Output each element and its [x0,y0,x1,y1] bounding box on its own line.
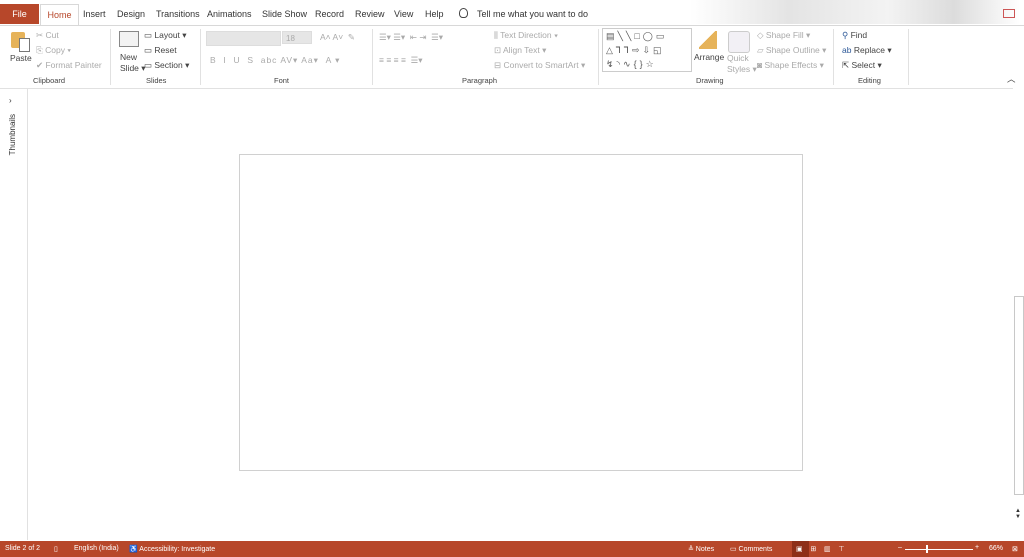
drawing group: Drawing [696,76,724,85]
paragraph group: ⊡ Align Text ▾ [494,45,546,55]
scrollbar [1013,88,1024,540]
font group: Font [274,76,289,85]
scrollbar: ▲ [1015,508,1021,514]
slide [239,154,803,471]
status bar: – [898,544,902,551]
paragraph group: ⊟ Convert to SmartArt ▾ [494,60,585,70]
paragraph group: ⫼ Text Direction ▾ [494,30,558,40]
clipboard group: ✂ Cut [36,30,59,40]
status bar: English (India) [74,545,119,552]
scrollbar: ▼ [1015,514,1021,520]
slides group [119,30,190,85]
status bar [0,541,1024,557]
font group [206,31,355,85]
tab bar: Review [355,9,385,19]
tab bar: Transitions [156,9,200,19]
Home tab [40,4,79,26]
File tab [0,4,39,24]
thumbnails pane: Thumbnails [8,114,17,155]
tab bar: Slide Show [262,9,307,19]
decorative header background [690,0,1020,24]
clipboard group: ⎘ Copy ▾ [36,45,71,55]
status bar: ≜ Notes [688,546,714,553]
tab bar: Animations [207,9,252,19]
slides group: New [120,52,137,62]
clipboard group: Clipboard [33,76,65,85]
drawing group: ◙ Shape Effects ▾ [757,60,824,70]
clipboard group: ✔ Format Painter [36,60,102,70]
slides group: Slides [146,76,166,85]
paragraph group: ☰▾ ☰▾ ⇤ ⇥ ☰▾ [379,32,443,42]
status bar: + [975,544,979,551]
paragraph group: ≡ ≡ ≡ ≡ ☰▾ [379,55,423,65]
drawing group: Styles ▾ [727,64,757,74]
icon: comments [1003,9,1015,18]
status bar: ♿ Accessibility: Investigate [129,546,215,553]
editing group [842,30,892,85]
tab bar [0,0,1024,25]
drawing group: △⅂⅂⇨⇩◱ [606,45,665,55]
tab bar: Insert [83,9,106,19]
drawing group: ▤╲╲□◯▭ [606,31,667,41]
ribbon [0,25,1024,89]
status bar: Slide 2 of 2 [5,545,40,552]
tab bar: Tell me what you want to do [477,9,588,19]
drawing group: ↯◝∿{}☆ [606,59,657,69]
slides group: ▭ Layout ▾ [144,30,187,40]
editing group: ⚲ Find [842,30,867,40]
clipboard group: Paste [10,53,32,63]
font group: A˄ A˅ ✎ [320,32,355,42]
clipboard group [10,30,102,85]
drawing group: ▱ Shape Outline ▾ [757,45,826,55]
drawing group [602,28,826,85]
slides group: ▭ Reset [144,45,177,55]
thumbnails pane: › [9,96,12,105]
status bar: ⊠ [1012,546,1018,553]
drawing group: Arrange [694,52,724,62]
ribbon: ︿ [1007,74,1016,84]
slides group: Slide ▾ [120,63,146,73]
editing group: ⇱ Select ▾ [842,60,882,70]
slides group: ▭ Section ▾ [144,60,189,70]
paragraph group: Paragraph [462,76,497,85]
thumbnails pane [0,88,28,540]
Home tab: Home [47,10,72,20]
font group: 18 [286,34,295,43]
tab bar: Record [315,9,344,19]
status bar: ▣ ⊞ ▥ ⊤ [796,546,845,553]
drawing group: ◇ Shape Fill ▾ [757,30,810,40]
status bar: ▭ Comments [730,546,772,553]
File tab: File [12,9,27,19]
font group: B I U S abc AV▾ Aa▾ A ▾ [210,55,340,65]
icon: lightbulb [459,8,468,18]
drawing group: Quick [727,53,749,63]
tab bar: Help [425,9,444,19]
status bar: 66% [989,545,1003,552]
editing group: Editing [858,76,881,85]
tab bar: Design [117,9,145,19]
paragraph group [379,30,586,85]
status bar: ▯ [54,546,58,553]
tab bar: View [394,9,413,19]
editing group: ab Replace ▾ [842,45,892,55]
